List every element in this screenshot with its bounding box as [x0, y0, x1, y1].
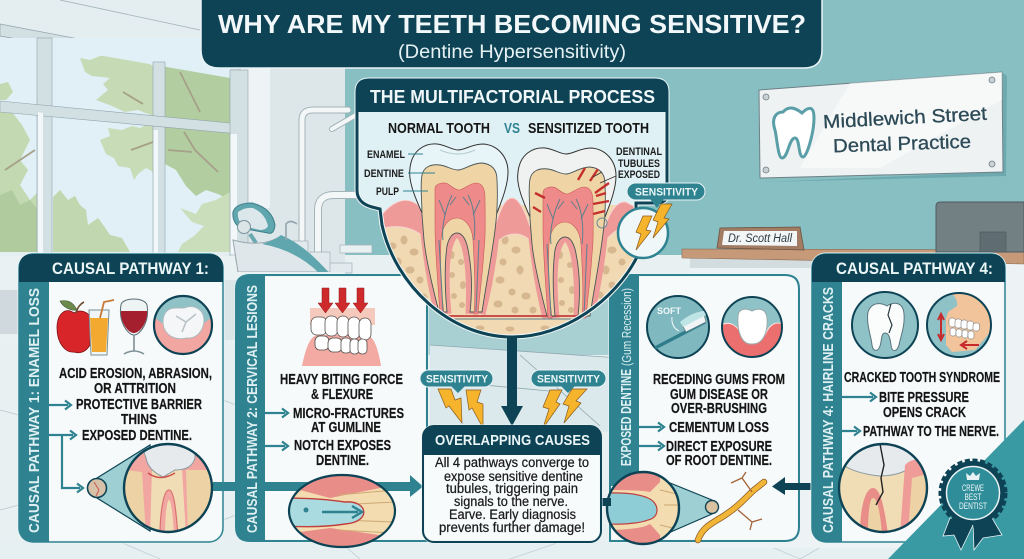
icon: apple: [57, 301, 90, 353]
practice sign: Middlewich Street: [823, 104, 988, 133]
text: enamel loss steps: OR ATTRITION: [94, 381, 176, 397]
icon: tooth surface circle: [152, 296, 214, 356]
sensitivity red tubule arrows: [533, 168, 609, 214]
tooth part labels: ENAMEL: [367, 149, 405, 161]
tooth part labels: DENTINAL: [616, 146, 662, 158]
body text: All 4 pathways converge to: [435, 455, 589, 470]
comparison titles: SENSITIZED TOOTH: [528, 120, 649, 137]
connector arrow from pathway 4: [772, 477, 814, 495]
connector from overlapping causes to root magnifier: [601, 498, 611, 506]
text: hairline crack steps: BITE PRESSURE: [879, 390, 969, 406]
text: cervical lesion steps: HEAVY BITING FORCE: [280, 372, 403, 388]
arrows: [49, 400, 83, 492]
icon: soft toothbrush: SOFT: [657, 306, 681, 317]
badge: sensitivity left: SENSITIVITY: [426, 374, 489, 386]
icon: soft toothbrush: [647, 296, 709, 358]
tooth part labels: DENTINE: [364, 168, 404, 180]
title banner: (Dentine Hypersensitivity): [398, 42, 626, 63]
icon: nerve root: [698, 472, 764, 540]
icon: juice glass: [89, 300, 114, 355]
text: hairline crack steps: OPENS CRACK: [883, 405, 966, 421]
text: gum recession steps: RECEDING GUMS FROM: [653, 372, 785, 388]
comparison titles: VS: [504, 120, 520, 137]
title banner: WHY ARE MY TEETH BECOMING SENSITIVE?: [218, 9, 806, 39]
illustration: sensitized tooth: [518, 148, 616, 318]
title banner: [201, 0, 822, 68]
body text: tubules, triggering pain: [446, 481, 578, 496]
badge: Crewe Best Dentist: BEST: [964, 492, 982, 502]
badge: Crewe Best Dentist: [941, 461, 1005, 550]
panel: causal pathway 4: [812, 254, 1005, 542]
comparison titles: [388, 120, 649, 137]
badge: Crewe Best Dentist: DENTIST: [959, 501, 987, 511]
side label: CAUSAL PATHWAY 4: HAIRLINE CRACKS: [820, 287, 837, 533]
body text: prevents further damage!: [439, 520, 585, 535]
side label: EXPOSED DENTINE: [618, 369, 635, 466]
dental equipment arm: [302, 110, 360, 258]
text: enamel loss steps: THINS: [121, 412, 157, 428]
arrows: [842, 392, 876, 436]
badge: sensitivity right: [531, 370, 606, 428]
side label: CAUSAL PATHWAY 1: ENAMEL LOSS: [26, 288, 43, 533]
badge: sensitivity left: [420, 370, 493, 428]
name plate: Dr. Scott Hall: [728, 233, 792, 245]
text: cervical lesion steps: & FLEXURE: [311, 387, 373, 403]
body text: signals to the nerve.: [454, 494, 568, 509]
side wall: [248, 68, 345, 268]
icon: jaw with bite pressure: [927, 292, 992, 357]
text: hairline crack steps: [844, 370, 1000, 440]
text: cervical lesion steps: DENTINE.: [316, 453, 369, 469]
floor: [0, 256, 345, 345]
magnifier: cervical notch: [288, 474, 396, 548]
illustration: normal tooth: [410, 144, 508, 314]
bowl outline: [357, 80, 667, 337]
text: cervical lesion steps: AT GUMLINE: [311, 420, 381, 436]
corner accent: [888, 420, 1024, 559]
badge: sensitivity right: SENSITIVITY: [537, 374, 601, 386]
body text: Earve. Early diagnosis: [449, 507, 576, 522]
teal wall: [345, 0, 1024, 255]
practice sign: Dental Practice: [833, 132, 971, 157]
panel: the multifactorial process: [357, 80, 667, 340]
tooth part labels: TUBULES: [618, 158, 660, 170]
text: enamel loss steps: [59, 366, 212, 444]
body text: [435, 455, 589, 535]
panel: causal pathway 3: [605, 275, 799, 546]
computer monitor: [936, 202, 1024, 252]
text: cervical lesion steps: MICRO-FRACTURES: [293, 406, 404, 422]
arrow: process down to overlapping causes: [501, 337, 523, 426]
reception desk: [682, 249, 1024, 548]
comparison titles: NORMAL TOOTH: [388, 120, 490, 137]
heading: CAUSAL PATHWAY 1:: [52, 259, 209, 278]
text: enamel loss steps: ACID EROSION, ABRASION,: [59, 366, 212, 382]
badge: sensitivity near tooth: SENSITIVITY: [635, 186, 699, 198]
magnifier: exposed root dentine: [605, 470, 718, 546]
heading: CAUSAL PATHWAY 4:: [836, 259, 993, 278]
arrows: [639, 422, 664, 450]
icon: tooth logo: [774, 108, 814, 158]
text: gum recession steps: OVER-BRUSHING: [671, 401, 767, 417]
magnifier: enamel erosion: [88, 440, 216, 536]
text: enamel loss steps: EXPOSED DENTINE.: [82, 428, 192, 444]
text: gum recession steps: [653, 372, 785, 469]
dental chair: [233, 203, 352, 273]
practice sign: [759, 72, 1007, 182]
text: gum recession steps: OF ROOT DENTINE.: [666, 453, 772, 469]
side label: CAUSAL PATHWAY 2: CERVICAL LESIONS: [244, 285, 261, 533]
text: cervical lesion steps: NOTCH EXPOSES: [294, 438, 391, 454]
badge: Crewe Best Dentist: CREWE: [962, 483, 984, 493]
icon: biting teeth with force arrows: [302, 288, 381, 366]
text: gum recession steps: DIRECT EXPOSURE: [666, 439, 772, 455]
badge: sensitivity near tooth: [618, 183, 705, 258]
window mullions: [0, 38, 248, 260]
panel: overlapping causes: [423, 426, 601, 542]
side label: (Gum Recession): [620, 288, 634, 366]
tooth part labels: EXPOSED: [618, 169, 660, 181]
body text: expose sensitive dentine: [444, 469, 583, 484]
text: gum recession steps: CEMENTUM LOSS: [669, 420, 769, 436]
name plate: [717, 227, 804, 250]
text: enamel loss steps: PROTECTIVE BARRIER: [76, 397, 202, 413]
panel: causal pathway 2: [213, 275, 427, 552]
heading: THE MULTIFACTORIAL PROCESS: [370, 87, 655, 107]
icon: cracked tooth: [852, 292, 918, 358]
gum and bone: [383, 198, 634, 334]
icon: wine glass: [120, 299, 148, 354]
heading: [357, 80, 667, 112]
connector arrow to overlapping causes: [213, 475, 423, 497]
tooth part labels: [364, 146, 662, 198]
panel: causal pathway 1: [19, 254, 223, 542]
magnifier: crack reaching nerve: [838, 444, 928, 534]
text: gum recession steps: GUM DISEASE OR: [670, 387, 768, 403]
text: cervical lesion steps: [280, 372, 404, 469]
icon: receding gum tooth: [721, 297, 785, 358]
arrows: [265, 408, 288, 450]
heading: OVERLAPPING CAUSES: [435, 432, 590, 449]
window with tree view: [0, 0, 248, 260]
tooth part labels: PULP: [376, 186, 399, 198]
